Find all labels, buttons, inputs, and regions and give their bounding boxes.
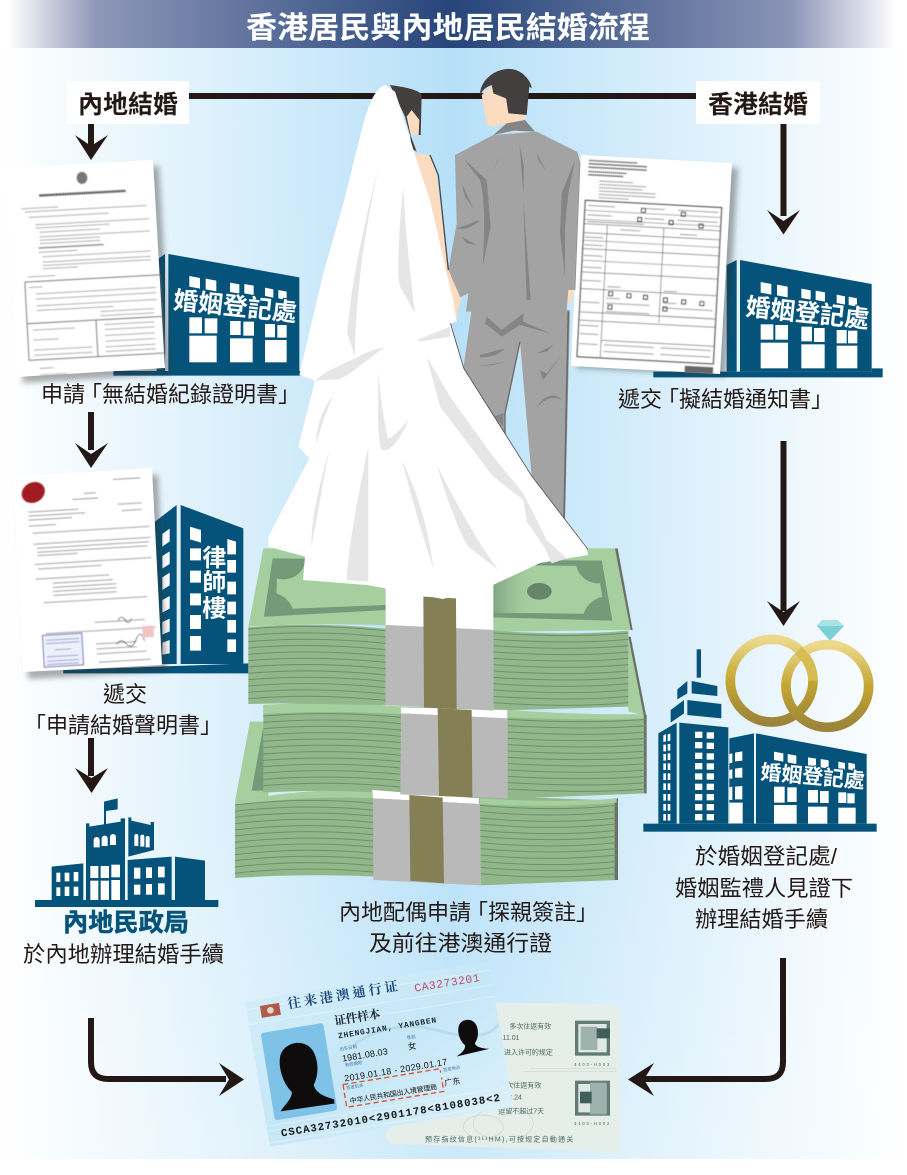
- building: marriage registry (left): 婚姻登記處: [172, 286, 299, 327]
- middle banknote stack: [263, 637, 647, 799]
- heading: Hong Kong marriage: 香港結婚: [708, 91, 808, 119]
- card back: 3.24: [508, 1094, 522, 1101]
- label: submit declaration: 遞交: [103, 682, 147, 707]
- card back: 查次往返有效: [499, 1080, 541, 1089]
- building: law office: 律: [202, 545, 226, 572]
- heading: mainland marriage: 內地結婚: [78, 91, 178, 119]
- document: marriage declaration: [13, 468, 167, 679]
- emblem: [260, 1003, 281, 1018]
- card back: 进入许可的规定: [504, 1047, 553, 1056]
- card back: 4403-H002: [574, 1121, 610, 1126]
- groom: [448, 69, 580, 522]
- card front: 广东: [444, 1075, 461, 1088]
- illustration: couple seen from behind: [268, 69, 588, 599]
- card front: 签发机关: [346, 1082, 365, 1091]
- card back: [385, 1003, 620, 1151]
- building: mainland civil affairs bureau: [35, 798, 218, 907]
- label: process at marriage registry or by celebrant: [675, 844, 853, 932]
- label: spouse applies for exit-entry permit: 內地配偶申請「探親簽註」: [339, 900, 598, 925]
- card front: 往来港澳通行证: [286, 975, 400, 1012]
- QR codes: [575, 1021, 610, 1116]
- top paper band: [386, 583, 493, 711]
- label: submit notice of intended marriage: 遞交「擬結婚通知書」: [618, 387, 833, 412]
- card front: [245, 960, 513, 1147]
- label: spouse applies for exit-entry permit: [339, 900, 598, 956]
- title bar: 香港居民與內地居民結婚流程: [246, 12, 650, 45]
- bottom paper band: [372, 790, 481, 885]
- title bar: [8, 0, 896, 48]
- card front: 证件样本: [333, 1005, 382, 1029]
- card back: .11.01: [501, 1035, 520, 1042]
- card front: 有效期限: [344, 1059, 363, 1069]
- card front: 性别: [406, 1033, 416, 1041]
- label: spouse applies for exit-entry permit: 及前往港澳通行證: [369, 931, 552, 956]
- card back: 预存指纹信息(¹¹¹HM),可按规定自動通关: [425, 1135, 573, 1144]
- card back: 4403-H003: [574, 1062, 610, 1067]
- card front: 女: [407, 1040, 417, 1052]
- building: city marriage registry: [643, 649, 877, 832]
- card front: 出生日期: [339, 1043, 358, 1053]
- card front: 签发地点: [442, 1064, 461, 1074]
- document: notice of intended marriage form: [571, 155, 738, 376]
- building: city marriage registry: 婚姻登記處: [760, 760, 866, 793]
- icon: gold wedding rings with diamond: [730, 620, 869, 727]
- label: submit declaration: [24, 682, 222, 738]
- heading: Hong Kong marriage: [696, 81, 820, 124]
- label: submit declaration: 「申請結婚聲明書」: [24, 713, 222, 738]
- bottom banknote stack: [235, 722, 618, 885]
- middle paper band: [400, 707, 508, 799]
- building: law office: 師: [202, 570, 226, 597]
- card front: CA3273201: [414, 973, 481, 996]
- bride: [268, 85, 588, 599]
- card front: 2019.01.18 - 2029.01.17: [344, 1057, 448, 1084]
- card front: 中华人民共和国出入境管理局: [349, 1082, 438, 1105]
- label: process marriage in mainland: 於內地辦理結婚手續: [23, 942, 224, 967]
- label: process at marriage registry or by celebrant: 辦理結婚手續: [695, 907, 828, 932]
- illustration: Two-way exit-entry permit card: [245, 960, 620, 1151]
- connector line between the two routes: [187, 93, 701, 99]
- document: no-marriage-record certificate form: [6, 160, 171, 383]
- card front: CSCA32732010<2901178<8108038<2: [280, 1093, 501, 1140]
- building: law office: 樓: [202, 596, 226, 623]
- arrows: route flow: [75, 124, 800, 1096]
- card back: 多次往返有效: [509, 1021, 551, 1030]
- card back: 逗留不超过7天: [498, 1106, 544, 1115]
- card front: 1981.08.03: [341, 1046, 388, 1064]
- building: marriage registry (left): [113, 254, 310, 376]
- top banknote stack: [246, 534, 633, 711]
- label: mainland civil affairs bureau: 內地民政局: [63, 909, 189, 937]
- label: apply for no-marriage-record certificate: 申請「無結婚紀錄證明書」: [41, 382, 300, 407]
- photo: [261, 1023, 337, 1120]
- label: process at marriage registry or by celebrant: 婚姻監禮人見證下: [675, 876, 853, 901]
- illustration: stacks of banknotes: [235, 534, 647, 885]
- label: process at marriage registry or by celebrant: 於婚姻登記處/: [695, 844, 838, 869]
- building: marriage registry (right): 婚姻登記處: [744, 293, 871, 334]
- building: law office: [63, 505, 248, 673]
- card front: ZHENGJIAN, YANGBEN: [338, 1016, 437, 1041]
- heading: mainland marriage: [67, 81, 189, 124]
- building: marriage registry (right): [653, 260, 883, 377]
